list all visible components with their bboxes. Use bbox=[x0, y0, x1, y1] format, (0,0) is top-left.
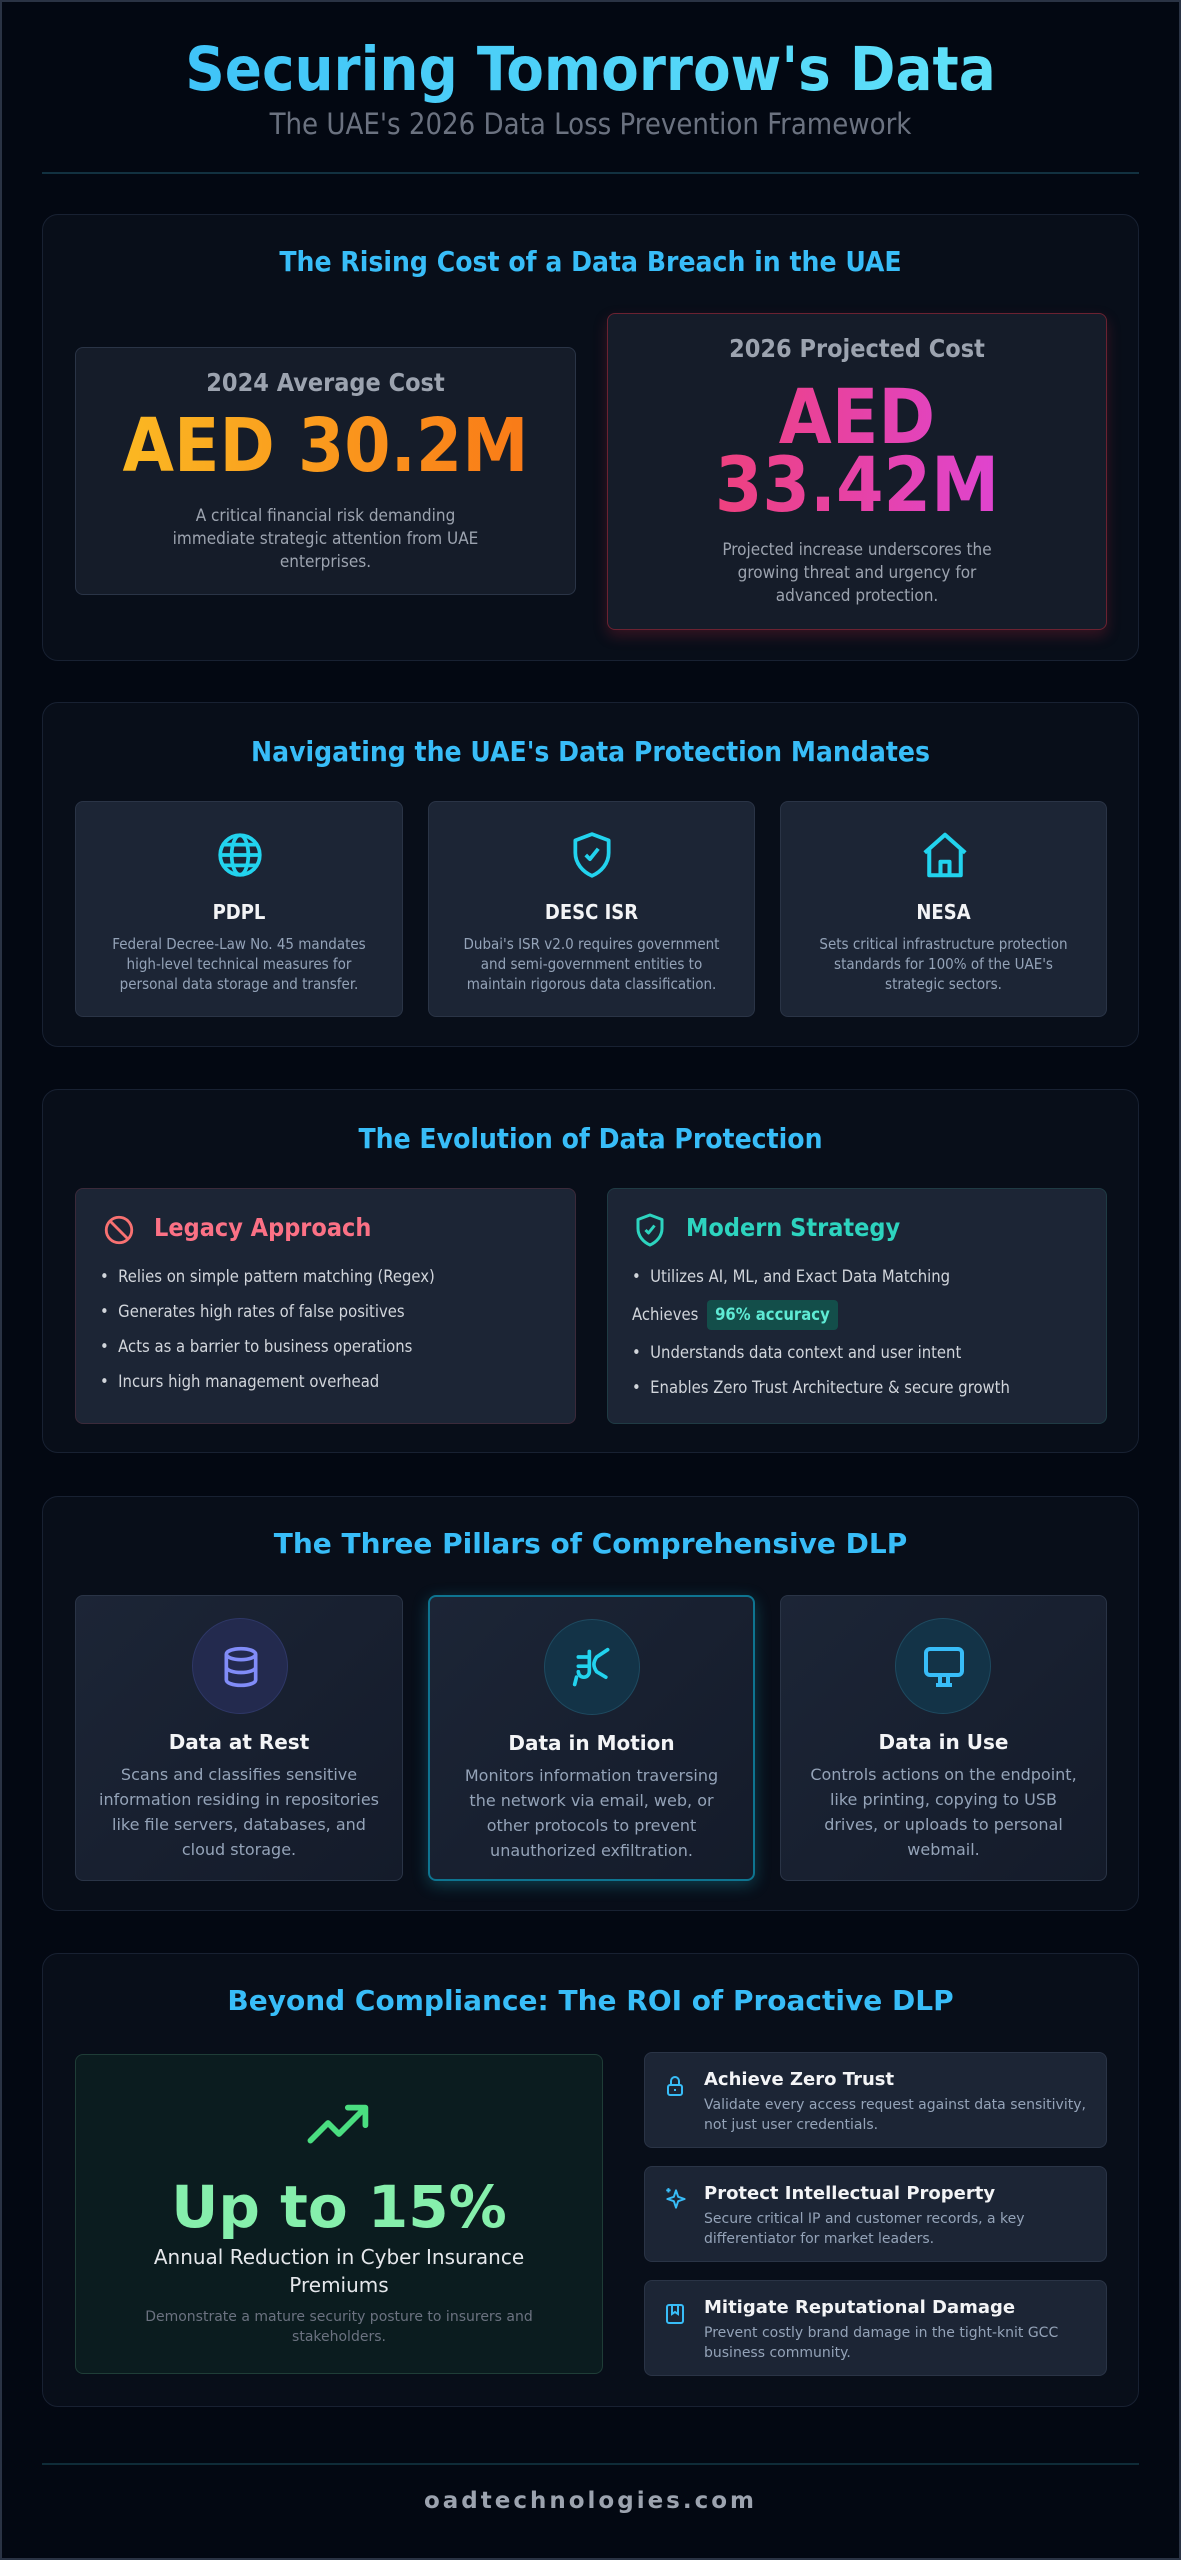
card: DESC ISR bbox=[428, 801, 755, 1017]
heading: ROI: Beyond Compliance: The ROI of Proactive DLP bbox=[227, 1984, 954, 2017]
card: DESC ISR: Dubai's ISR v2.0 requires government and semi-government entities to maintain rigorous data classification. bbox=[464, 935, 719, 993]
card: 2024 cost: AED 30.2M bbox=[122, 403, 528, 489]
card: 2024 cost: A critical financial risk demanding immediate strategic attention from UAE enterprises. bbox=[173, 506, 478, 572]
heading: evolution: The Evolution of Data Protection bbox=[358, 1122, 823, 1155]
card: PDPL bbox=[75, 801, 403, 1017]
footer: oadtechnologies.com bbox=[424, 2488, 757, 2514]
card: legacy: • Generates high rates of false positives bbox=[100, 1302, 405, 1321]
card: zero trust: Achieve Zero Trust bbox=[704, 2069, 894, 2090]
card: insurance reduction: Annual Reduction in Cyber Insurance Premiums bbox=[154, 2245, 524, 2297]
card: 2026 projected: AED bbox=[779, 372, 935, 461]
card: IP bbox=[644, 2166, 1107, 2262]
icon: prohibited bbox=[104, 1216, 134, 1244]
panel: ROI bbox=[42, 1953, 1139, 2407]
card: 2024 cost bbox=[75, 347, 576, 595]
icon: plug bbox=[544, 1619, 640, 1715]
card: insurance reduction: Demonstrate a mature security posture to insurers and stakeholders. bbox=[145, 2309, 533, 2345]
card: 2026 projected bbox=[607, 313, 1107, 630]
icon: globe bbox=[218, 833, 262, 877]
card: data in use: Data in Use bbox=[879, 1730, 1008, 1754]
card: PDPL: PDPL bbox=[213, 900, 265, 924]
panel: rising cost bbox=[42, 214, 1139, 661]
card: reputation: Prevent costly brand damage in the tight-knit GCC business community. bbox=[704, 2325, 1058, 2361]
card: zero trust bbox=[644, 2052, 1107, 2148]
card: 2026 projected: Projected increase underscores the growing threat and urgency for advanced protection. bbox=[722, 540, 992, 606]
card: NESA bbox=[780, 801, 1107, 1017]
card: IP: Protect Intellectual Property bbox=[704, 2183, 995, 2204]
card: data at rest: Scans and classifies sensitive information residing in repositories like file servers, databases, and cloud storage. bbox=[99, 1765, 379, 1859]
card: modern: • Enables Zero Trust Architecture & secure growth bbox=[632, 1378, 1010, 1397]
card: PDPL: Federal Decree-Law No. 45 mandates high-level technical measures for personal data storage and transfer. bbox=[112, 935, 366, 993]
card: insurance reduction: Up to 15% bbox=[171, 2173, 507, 2241]
card: data at rest bbox=[75, 1595, 403, 1881]
card: modern: • Utilizes AI, ML, and Exact Data Matching bbox=[632, 1267, 950, 1286]
card: data in motion bbox=[428, 1595, 755, 1881]
card: 2026 projected: 2026 Projected Cost bbox=[729, 334, 985, 363]
card: legacy: • Relies on simple pattern matching (Regex) bbox=[100, 1267, 435, 1286]
card: modern: Modern Strategy bbox=[686, 1213, 900, 1242]
card: legacy: Legacy Approach bbox=[154, 1213, 371, 1242]
card: zero trust: Validate every access request against data sensitivity, not just user credentials. bbox=[704, 2097, 1086, 2133]
heading: mandates: Navigating the UAE's Data Protection Mandates bbox=[251, 735, 930, 768]
card: legacy: • Incurs high management overhead bbox=[100, 1372, 379, 1391]
card: NESA: Sets critical infrastructure protection standards for 100% of the UAE's strategic sectors. bbox=[819, 935, 1068, 993]
title bbox=[0, 32, 1181, 108]
card: modern bbox=[607, 1188, 1107, 1424]
icon: sparkles bbox=[666, 2188, 686, 2209]
icon: home bbox=[924, 832, 966, 878]
panel: mandates bbox=[42, 702, 1139, 1047]
card: legacy bbox=[75, 1188, 576, 1424]
card: modern: Achieves bbox=[632, 1305, 698, 1324]
icon: lock bbox=[667, 2076, 683, 2096]
panel: evolution bbox=[42, 1089, 1139, 1453]
icon: bookmark bbox=[666, 2304, 684, 2324]
card: legacy: • Acts as a barrier to business operations bbox=[100, 1337, 412, 1356]
title: Securing Tomorrow's Data bbox=[185, 34, 996, 105]
card: data in use bbox=[780, 1595, 1107, 1881]
card: NESA: NESA bbox=[916, 900, 971, 924]
heading: pillars: The Three Pillars of Comprehensive DLP bbox=[274, 1527, 907, 1560]
icon: trending up bbox=[308, 2104, 368, 2144]
card: DESC ISR: DESC ISR bbox=[545, 900, 638, 924]
card: 2026 projected: 33.42M bbox=[715, 440, 999, 529]
icon: database bbox=[192, 1618, 288, 1714]
icon: shield check teal bbox=[636, 1214, 664, 1246]
card: reputation: Mitigate Reputational Damage bbox=[704, 2297, 1015, 2318]
panel: pillars bbox=[42, 1496, 1139, 1911]
card: modern: 96% accuracy bbox=[715, 1305, 830, 1324]
card: modern: • Understands data context and user intent bbox=[632, 1343, 961, 1362]
icon: monitor bbox=[895, 1618, 991, 1714]
card: data in motion: Data in Motion bbox=[508, 1731, 675, 1755]
card: 2024 cost: 2024 Average Cost bbox=[206, 368, 445, 397]
card: data in motion: Monitors information traversing the network via email, web, or other protocols to prevent unauthorized exfiltration. bbox=[465, 1766, 718, 1860]
card: data at rest: Data at Rest bbox=[169, 1730, 309, 1754]
subtitle: The UAE's 2026 Data Loss Prevention Framework bbox=[270, 107, 911, 141]
card: reputation bbox=[644, 2280, 1107, 2376]
card: IP: Secure critical IP and customer records, a key differentiator for market leaders. bbox=[704, 2211, 1025, 2247]
card: insurance reduction bbox=[75, 2054, 603, 2374]
icon: shield check bbox=[573, 832, 611, 878]
card: data in use: Controls actions on the endpoint, like printing, copying to USB drives, or uploads to personal webmail. bbox=[810, 1765, 1077, 1859]
heading: rising cost: The Rising Cost of a Data Breach in the UAE bbox=[279, 245, 902, 278]
